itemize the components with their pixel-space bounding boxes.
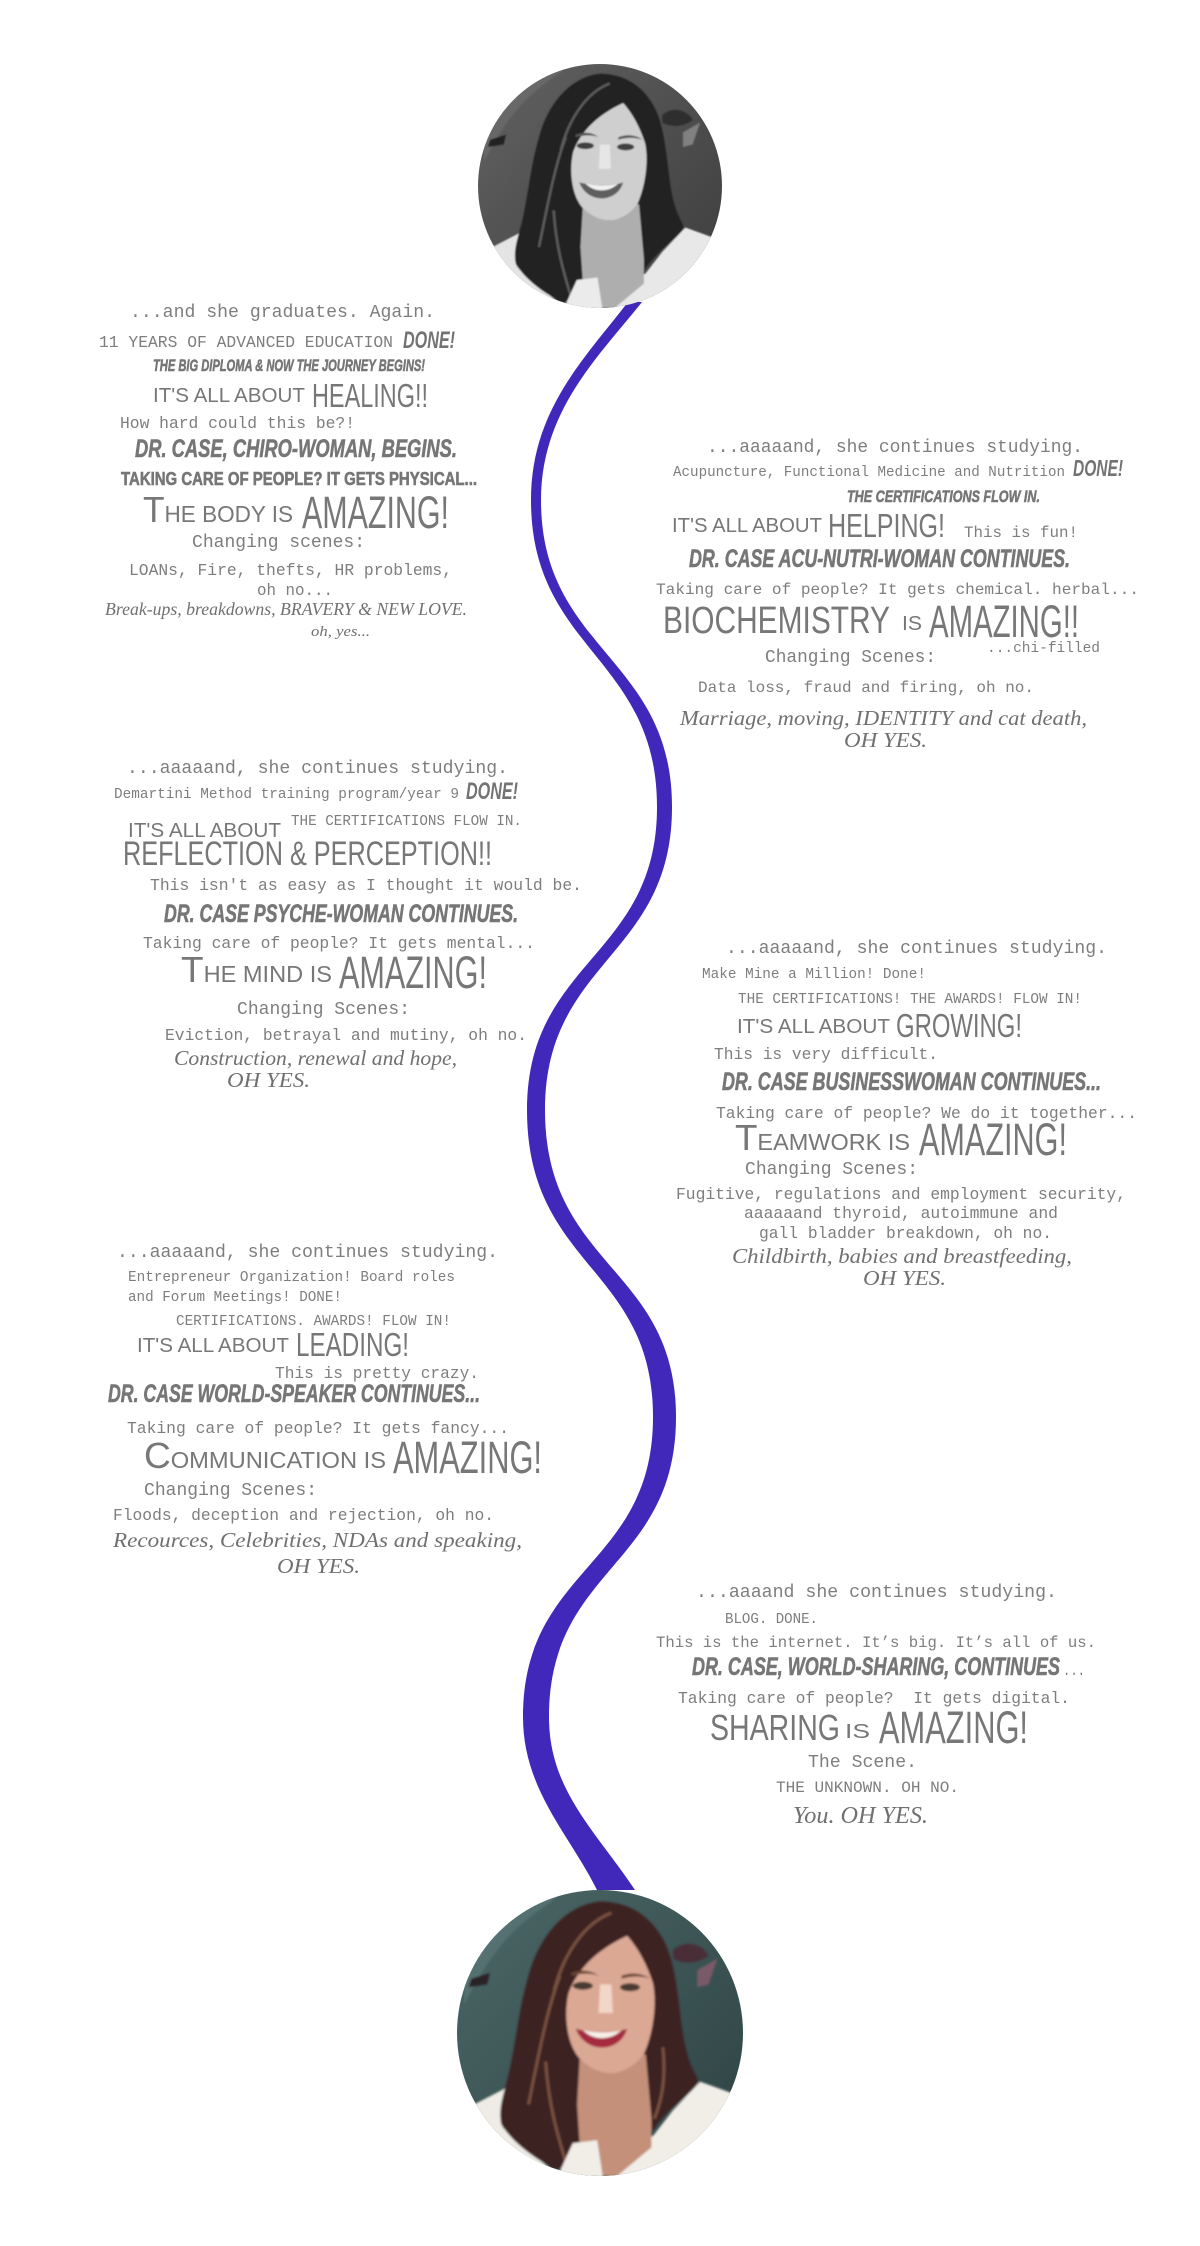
oh yes: OH YES.: [863, 1266, 946, 1290]
scenes line two: aaaaaand thyroid, autoimmune and: [744, 1204, 1058, 1223]
oh yes: oh, yes...: [311, 624, 370, 640]
scenes line one: Fugitive, regulations and employment security,: [676, 1185, 1126, 1204]
done stamp: DONE!: [403, 327, 455, 354]
crazy line: This is pretty crazy.: [275, 1365, 479, 1383]
studies line: Acupuncture, Functional Medicine and Nutrition: [673, 465, 1065, 481]
the unknown: THE UNKNOWN. OH NO.: [776, 1779, 959, 1797]
the body is: THE BODY IS: [143, 489, 293, 530]
helping word: HELPING!: [828, 507, 945, 544]
amazing word: AMAZING!!: [929, 596, 1079, 647]
changing scenes: Changing Scenes:: [765, 648, 936, 668]
is word: IS: [902, 613, 922, 635]
certifications line: THE CERTIFICATIONS FLOW IN.: [291, 814, 522, 830]
scenes list: Floods, deception and rejection, oh no.: [113, 1506, 494, 1525]
done stamp: DONE!: [466, 778, 518, 805]
amazing word: AMAZING!: [393, 1432, 542, 1483]
changing scenes: Changing scenes:: [192, 533, 365, 553]
handwritten line: Recources, Celebrities, NDAs and speaking,: [112, 1528, 522, 1552]
oh yes: OH YES.: [227, 1068, 310, 1092]
oh yes: OH YES.: [277, 1554, 360, 1578]
diploma line: THE BIG DIPLOMA & NOW THE JOURNEY BEGINS!: [153, 356, 425, 375]
about line: IT'S ALL ABOUT: [737, 1016, 890, 1038]
panel: psyche-woman: [114, 759, 582, 1092]
studies line: Demartini Method training program/year 9: [114, 787, 459, 803]
handwritten line: Break-ups, breakdowns, BRAVERY & NEW LOVE.: [105, 599, 467, 619]
taking care line: Taking care of people? We do it together...: [716, 1104, 1137, 1123]
amazing word: AMAZING!: [302, 487, 449, 538]
portrait: colour, bottom: [457, 1890, 743, 2177]
about line: IT'S ALL ABOUT: [153, 385, 305, 407]
amazing word: AMAZING!: [879, 1702, 1028, 1753]
communication is: COMMUNICATION IS: [144, 1435, 386, 1476]
scenes list: Data loss, fraud and firing, oh no.: [698, 679, 1034, 697]
question line: How hard could this be?!: [120, 414, 355, 433]
blog line: BLOG. DONE.: [725, 1612, 818, 1628]
scenes list: Eviction, betrayal and mutiny, oh no.: [165, 1026, 527, 1045]
timeline ribbon: [523, 302, 676, 1890]
difficult line: This is very difficult.: [714, 1046, 938, 1064]
intro line: ...aaaand she continues studying.: [696, 1583, 1057, 1603]
panel: world-sharing: [656, 1583, 1096, 1829]
handwritten line: Childbirth, babies and breastfeeding,: [732, 1244, 1072, 1268]
amazing word: AMAZING!: [339, 947, 487, 998]
reflection and perception words: REFLECTION & PERCEPTION!!: [123, 835, 492, 873]
done stamp: DONE!: [1073, 455, 1123, 481]
changing scenes: Changing Scenes:: [237, 1000, 410, 1020]
oh no: oh no...: [257, 581, 333, 600]
taking care line: Taking care of people? It gets mental...: [143, 934, 535, 953]
you oh yes: You. OH YES.: [793, 1803, 928, 1829]
certifications line: CERTIFICATIONS. AWARDS! FLOW IN!: [176, 1314, 451, 1330]
amazing word: AMAZING!: [919, 1114, 1067, 1165]
world-speaker heading: DR. CASE WORLD-SPEAKER CONTINUES...: [108, 1380, 480, 1408]
scenes list: LOANs, Fire, thefts, HR problems,: [129, 561, 452, 580]
taking care line: Taking care of people? It gets digital.: [678, 1689, 1070, 1708]
intro line: ...and she graduates. Again.: [130, 303, 435, 323]
scenes line three: gall bladder breakdown, oh no.: [759, 1224, 1052, 1243]
growing word: GROWING!: [896, 1007, 1022, 1044]
intro line: ...aaaaand, she continues studying.: [127, 759, 508, 779]
oh yes: OH YES.: [844, 728, 927, 752]
biochemistry word: BIOCHEMISTRY: [663, 600, 890, 642]
world-sharing heading: DR. CASE, WORLD-SHARING, CONTINUES: [692, 1653, 1060, 1681]
portrait: grayscale, top: [478, 64, 722, 309]
the mind is: THE MIND IS: [181, 949, 332, 990]
forum line: and Forum Meetings! DONE!: [128, 1290, 342, 1306]
healing word: HEALING!!: [312, 377, 428, 414]
chi-filled note: ...chi-filled: [987, 641, 1100, 657]
intro line: ...aaaaand, she continues studying.: [117, 1243, 498, 1263]
handwritten line: Construction, renewal and hope,: [174, 1046, 457, 1070]
certifications line: THE CERTIFICATIONS FLOW IN.: [847, 487, 1040, 506]
taking care line: TAKING CARE OF PEOPLE? IT GETS PHYSICAL...: [121, 469, 477, 489]
psyche-woman heading: DR. CASE PSYCHE-WOMAN CONTINUES.: [164, 900, 518, 928]
million line: Make Mine a Million! Done!: [702, 967, 926, 983]
education line: 11 YEARS OF ADVANCED EDUCATION: [99, 333, 393, 352]
fun line: This is fun!: [964, 524, 1078, 542]
taking care line: Taking care of people? It gets chemical. herbal...: [656, 581, 1139, 599]
not easy line: This isn't as easy as I thought it would be.: [150, 876, 582, 895]
about line: IT'S ALL ABOUT: [128, 820, 281, 842]
leading word: LEADING!: [296, 1326, 409, 1363]
about line: IT'S ALL ABOUT: [137, 1335, 289, 1357]
internet line: This is the internet. It’s big. It’s all of us.: [656, 1634, 1096, 1652]
teamwork is: TEAMWORK IS: [735, 1117, 910, 1158]
the scene: The Scene.: [808, 1753, 917, 1773]
panel: world-speaker: [108, 1243, 542, 1578]
intro line: ...aaaaand, she continues studying.: [707, 438, 1083, 458]
is word: IS: [845, 1721, 870, 1743]
handwritten line: Marriage, moving, IDENTITY and cat death,: [679, 706, 1087, 730]
taking care line: Taking care of people? It gets fancy...: [127, 1419, 509, 1438]
changing scenes: Changing Scenes:: [745, 1160, 918, 1180]
certifications line: THE CERTIFICATIONS! THE AWARDS! FLOW IN!: [738, 992, 1082, 1008]
panel: graduation and chiro-woman: [99, 303, 477, 640]
about line: IT'S ALL ABOUT: [672, 515, 822, 537]
heading ellipsis: ...: [1063, 1662, 1085, 1680]
changing scenes: Changing Scenes:: [144, 1481, 317, 1501]
chiro-woman heading: DR. CASE, CHIRO-WOMAN, BEGINS.: [135, 435, 457, 463]
organization line: Entrepreneur Organization! Board roles: [128, 1270, 455, 1286]
sharing word: SHARING: [710, 1707, 840, 1748]
panel: businesswoman: [676, 939, 1137, 1290]
panel: acu-nutri-woman: [656, 438, 1139, 752]
intro line: ...aaaaand, she continues studying.: [726, 939, 1107, 959]
